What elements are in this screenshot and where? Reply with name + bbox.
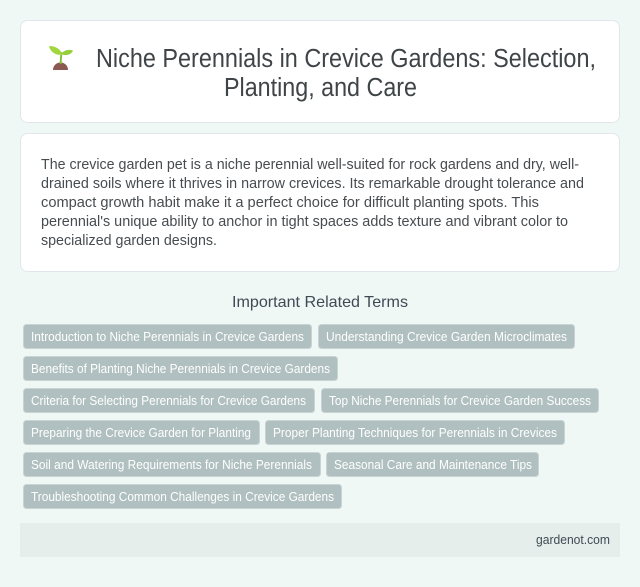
tag xyxy=(24,484,342,508)
footer xyxy=(20,523,620,557)
tag xyxy=(24,324,312,348)
tag: Introduction to Niche Perennials in Crevice Gardens xyxy=(31,330,304,344)
tag: Seasonal Care and Maintenance Tips xyxy=(334,458,532,472)
title xyxy=(96,45,596,102)
text block: description: perennial's unique ability to anchor in tight spaces adds texture and vibrant color to xyxy=(41,213,568,230)
tag: Soil and Watering Requirements for Niche Perennials xyxy=(31,458,312,472)
text block: description xyxy=(41,156,584,249)
heading: important related terms: Important Related Terms xyxy=(232,294,408,311)
tag xyxy=(24,356,338,380)
text block: description: specialized garden designs. xyxy=(41,232,217,249)
tag xyxy=(322,388,598,412)
tag: Proper Planting Techniques for Perennials in Crevices xyxy=(273,426,557,440)
tag xyxy=(24,452,320,476)
tag: Benefits of Planting Niche Perennials in Crevice Gardens xyxy=(31,362,330,376)
tag xyxy=(24,388,314,412)
tag: Criteria for Selecting Perennials for Crevice Gardens xyxy=(31,394,306,408)
text block: description: The crevice garden pet is a niche perennial well-suited for rock gardens and dry, well- xyxy=(41,156,579,173)
tag xyxy=(24,420,260,444)
tag: Top Niche Perennials for Crevice Garden Success xyxy=(329,394,591,408)
panel: header xyxy=(20,20,620,122)
tag xyxy=(266,420,564,444)
tag: Understanding Crevice Garden Microclimates xyxy=(326,330,567,344)
panel: description xyxy=(20,134,620,272)
text block: description: drained soils where it thrives in narrow crevices. Its remarkable drought tolerance and xyxy=(41,175,584,192)
tag: Preparing the Crevice Garden for Planting xyxy=(31,426,251,440)
title: Planting, and Care xyxy=(224,74,417,102)
footer: gardenot.com xyxy=(536,533,610,547)
tag list xyxy=(24,324,598,508)
tag: Troubleshooting Common Challenges in Crevice Gardens xyxy=(31,490,334,504)
icon: sprout xyxy=(49,46,73,70)
text block: description: compact growth habit make it a perfect choice for difficult planting spots. This xyxy=(41,194,539,211)
tag xyxy=(326,452,538,476)
tag xyxy=(318,324,574,348)
title: Niche Perennials in Crevice Gardens: Selection, xyxy=(96,45,596,73)
